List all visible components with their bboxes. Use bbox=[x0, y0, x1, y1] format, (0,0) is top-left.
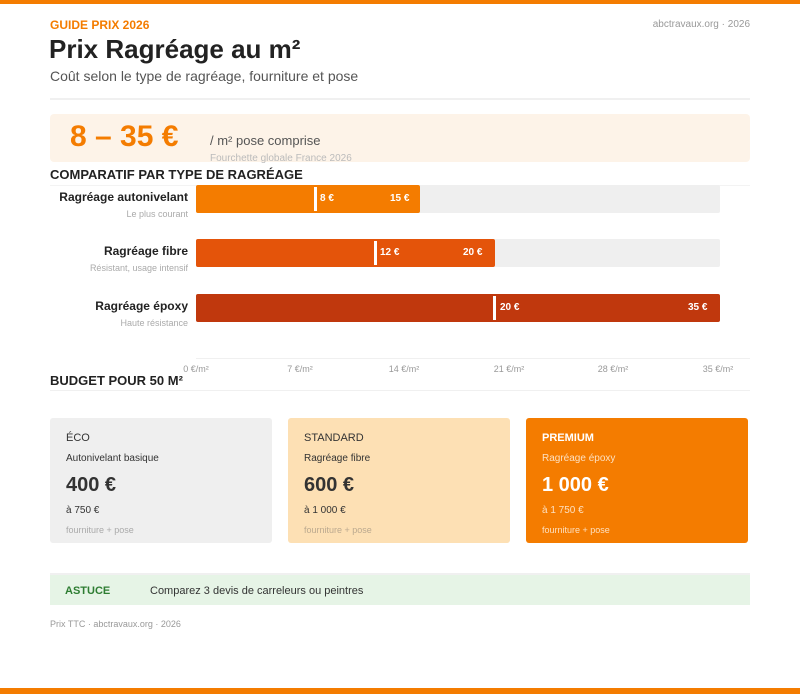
subtitle: Coût selon le type de ragréage, fourniture et pose bbox=[50, 68, 358, 84]
card: standard: 600 € bbox=[304, 474, 354, 496]
kicker: GUIDE PRIX 2026 bbox=[50, 18, 149, 32]
bottom bar bbox=[0, 688, 800, 694]
row: fibre bbox=[90, 239, 720, 273]
row: autonivelant: 15 € bbox=[390, 193, 409, 204]
card: standard: Ragréage fibre bbox=[304, 453, 370, 464]
bar chart bbox=[59, 185, 720, 328]
title: Prix Ragréage au m² bbox=[49, 34, 300, 64]
row: fibre: 20 € bbox=[463, 247, 482, 258]
budget heading: BUDGET POUR 50 M² bbox=[50, 373, 183, 388]
bar chart: Le plus courant bbox=[126, 209, 188, 219]
hero price box bbox=[50, 114, 750, 162]
source top right: abctravaux.org · 2026 bbox=[653, 19, 750, 30]
card: premium: PREMIUM bbox=[542, 432, 594, 444]
hero price: 8 – 35 € bbox=[70, 120, 178, 153]
card: premium: à 1 750 € bbox=[542, 505, 584, 516]
card: premium bbox=[526, 418, 748, 543]
hero unit: / m² pose comprise bbox=[210, 133, 321, 148]
axis labels: 7 €/m² bbox=[287, 364, 313, 374]
tip box bbox=[50, 573, 750, 605]
card: eco: Autonivelant basique bbox=[66, 453, 159, 464]
chart heading: COMPARATIF PAR TYPE DE RAGRÉAGE bbox=[50, 167, 303, 182]
card: premium: Ragréage époxy bbox=[542, 453, 615, 464]
axis labels bbox=[183, 364, 734, 374]
row: autonivelant: Ragréage autonivelant bbox=[59, 190, 188, 204]
axis labels: 0 €/m² bbox=[183, 364, 209, 374]
top bar bbox=[0, 0, 800, 4]
axis labels: 21 €/m² bbox=[494, 364, 524, 374]
tip text: Comparez 3 devis de carreleurs ou peintres bbox=[150, 585, 363, 597]
row: autonivelant: 8 € bbox=[320, 193, 334, 204]
card: standard bbox=[288, 418, 510, 543]
card: standard: STANDARD bbox=[304, 432, 364, 444]
row: fibre: Ragréage fibre bbox=[104, 244, 188, 258]
bar chart: Haute résistance bbox=[120, 318, 188, 328]
card: eco bbox=[50, 418, 272, 543]
row: autonivelant bbox=[59, 185, 720, 219]
tip label: ASTUCE bbox=[65, 585, 110, 597]
axis labels: 28 €/m² bbox=[598, 364, 628, 374]
card: premium: fourniture + pose bbox=[542, 525, 610, 535]
footer: Prix TTC · abctravaux.org · 2026 bbox=[50, 619, 181, 629]
hero note: Fourchette globale France 2026 bbox=[210, 153, 352, 164]
card: eco: ÉCO bbox=[66, 432, 90, 444]
bar chart: Résistant, usage intensif bbox=[90, 263, 188, 273]
row: epoxy bbox=[95, 294, 720, 328]
row: epoxy: 20 € bbox=[500, 302, 519, 313]
row: epoxy: 35 € bbox=[688, 302, 707, 313]
axis labels: 35 €/m² bbox=[703, 364, 733, 374]
card: standard: fourniture + pose bbox=[304, 525, 372, 535]
card: eco: fourniture + pose bbox=[66, 525, 134, 535]
card: standard: à 1 000 € bbox=[304, 505, 346, 516]
card: premium: 1 000 € bbox=[542, 474, 609, 496]
row: fibre: 12 € bbox=[380, 247, 399, 258]
card: eco: 400 € bbox=[66, 474, 116, 496]
card: eco: à 750 € bbox=[66, 505, 99, 516]
axis labels: 14 €/m² bbox=[389, 364, 419, 374]
row: epoxy: Ragréage époxy bbox=[95, 299, 188, 313]
